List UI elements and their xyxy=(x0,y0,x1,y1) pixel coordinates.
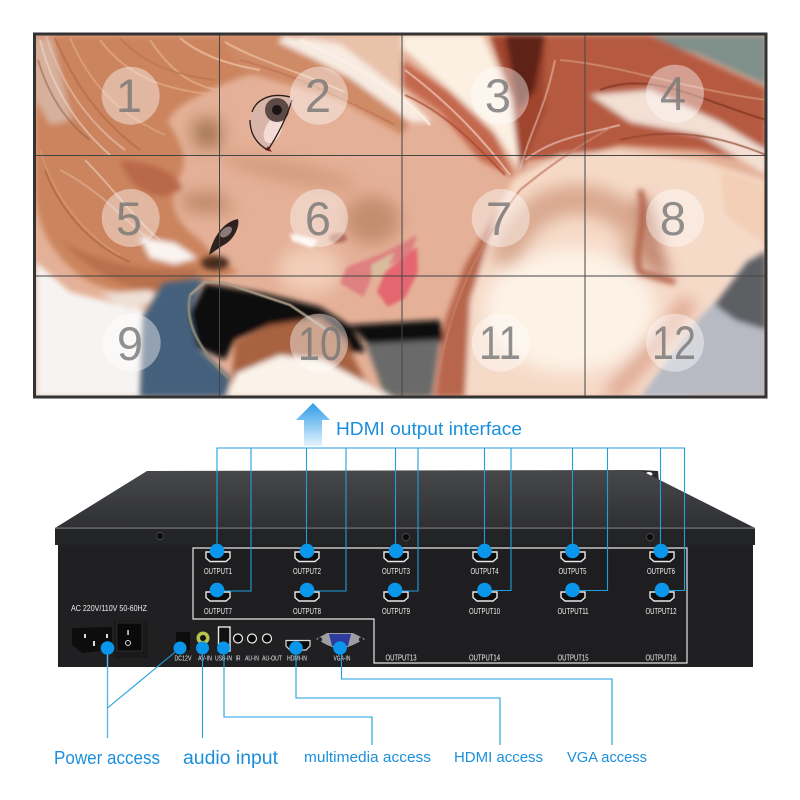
screen number badges: 4 xyxy=(660,67,686,120)
screws xyxy=(156,532,654,540)
heading: HDMI output interface: HDMI output interface xyxy=(336,418,522,439)
video wall photo with 12 screens xyxy=(34,34,766,397)
screen number badges: 12 xyxy=(652,316,696,369)
output port labels: OUTPUT16 xyxy=(646,652,677,662)
callout dots: inputs xyxy=(101,641,347,655)
input port labels: VGA-IN xyxy=(334,656,350,662)
label: HDMI access: HDMI access xyxy=(454,749,543,766)
power inlet xyxy=(72,627,112,653)
output port labels: OUTPUT7 xyxy=(204,606,232,616)
input port labels: IR xyxy=(236,656,240,662)
output port labels: OUTPUT6 xyxy=(647,566,675,576)
input port labels: HDMI-IN xyxy=(287,656,307,662)
rear panel body xyxy=(58,545,753,667)
frame of the video wall xyxy=(34,34,766,397)
photo: woman resting on her arm xyxy=(35,35,766,397)
output port labels: OUTPUT1 xyxy=(204,566,232,576)
audio jacks xyxy=(234,634,272,643)
screen number badges: 3 xyxy=(485,69,511,122)
HDMI input port xyxy=(286,640,310,650)
output port labels: OUTPUT10 xyxy=(469,606,500,616)
output port labels: OUTPUT8 xyxy=(293,606,321,616)
hair strands xyxy=(38,36,766,397)
screen number badges: 5 xyxy=(116,192,142,245)
screen number badges: 11 xyxy=(479,316,521,369)
screen number badges: 2 xyxy=(305,69,331,122)
output port labels: OUTPUT9 xyxy=(382,606,410,616)
input port labels: AV-IN xyxy=(198,656,212,662)
label: multimedia access: multimedia access xyxy=(304,749,431,766)
output port labels: OUTPUT4 xyxy=(470,566,499,576)
callout lines: HDMI outputs xyxy=(217,448,684,591)
output port labels: OUTPUT14 xyxy=(469,652,500,662)
label: Power access: Power access xyxy=(54,748,160,768)
output port labels: OUTPUT15 xyxy=(558,652,589,662)
input port labels: DC12V xyxy=(174,656,192,662)
label: VGA access: VGA access xyxy=(567,749,647,766)
voltage label: AC 220V/110V 50-60HZ xyxy=(71,603,147,613)
output port labels: OUTPUT3 xyxy=(382,566,410,576)
input port labels xyxy=(174,656,350,662)
power switch xyxy=(114,621,148,658)
screen number badges: 7 xyxy=(486,192,512,245)
eyes xyxy=(209,95,293,255)
output port labels: OUTPUT2 xyxy=(293,566,321,576)
DC jack xyxy=(176,632,190,650)
AV-in jack xyxy=(196,632,210,644)
output port labels: OUTPUT12 xyxy=(646,606,677,616)
input port labels: AU-OUT xyxy=(262,656,283,662)
mounting ears xyxy=(145,470,659,482)
label: audio input: audio input xyxy=(183,748,279,769)
input port labels: USB-IN xyxy=(215,656,232,662)
output area outline xyxy=(193,548,687,663)
top cover xyxy=(55,470,755,528)
device: rear of the video wall controller xyxy=(55,470,755,667)
screen grid lines xyxy=(35,35,766,397)
screen number badges: 1 xyxy=(116,69,142,122)
HDMI output ports xyxy=(206,552,674,601)
screen number badges: 6 xyxy=(305,192,331,245)
VGA input port xyxy=(316,633,365,648)
screen number badges: 9 xyxy=(117,317,143,370)
input port labels: AU-IN xyxy=(245,656,259,662)
callout dots: HDMI outputs xyxy=(210,544,669,597)
output port labels: OUTPUT5 xyxy=(558,566,587,576)
screen number badges xyxy=(102,65,704,372)
output port labels xyxy=(204,566,677,662)
front lip xyxy=(55,528,755,545)
arrow: signal up to the video wall xyxy=(296,403,330,446)
USB port xyxy=(218,627,230,651)
output port labels: OUTPUT11 xyxy=(558,606,589,616)
output port labels: OUTPUT13 xyxy=(386,652,417,662)
callout lines: inputs xyxy=(108,648,612,745)
screen number badges: 10 xyxy=(298,317,342,370)
screen number badges: 8 xyxy=(660,192,686,245)
